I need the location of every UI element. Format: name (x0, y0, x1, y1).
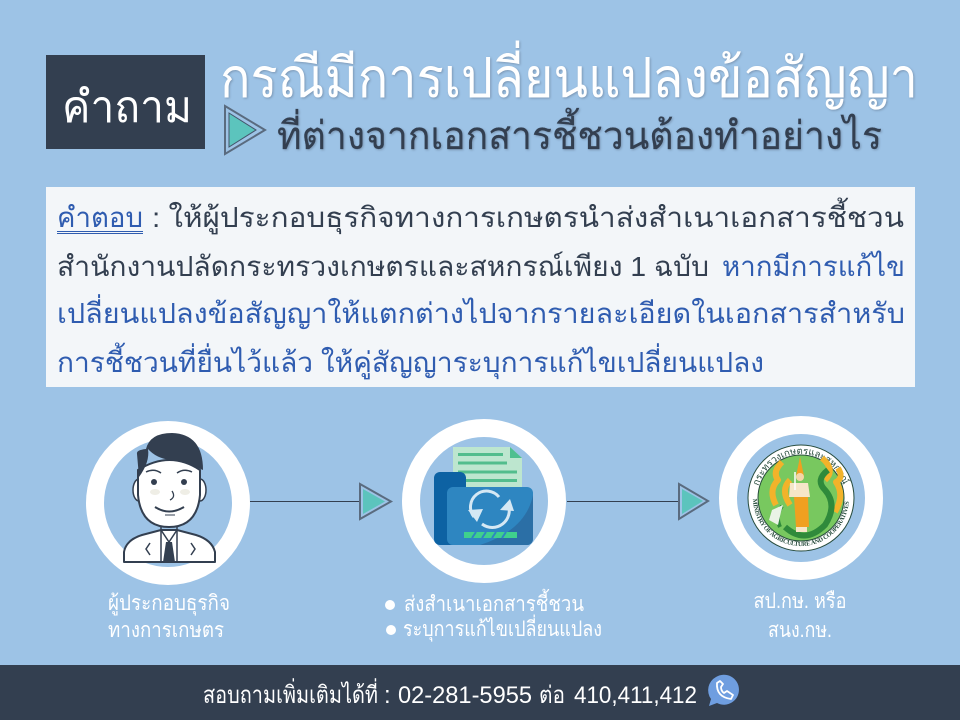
footer: 410,411,412 (574, 682, 697, 709)
answer line 1: : ให้ผู้ประกอบธุรกิจทางการเกษตรนำส่งสำเนาเอกสารชี้ชวน (152, 197, 904, 235)
document steps: ส่งสำเนาเอกสารชี้ชวน (404, 589, 584, 616)
answer line 2: หากมีการแก้ไข (722, 251, 905, 282)
footer: สอบถามเพิ่มเติมได้ที่ (203, 678, 378, 709)
icon: title arrow (225, 106, 265, 154)
arrow 1 (250, 484, 391, 519)
answer line 1: คำตอบ (57, 202, 143, 233)
title line 1: กรณีมีการเปลี่ยนแปลงข้อสัญญา (220, 40, 918, 110)
recipient label: สป.กษ. หรือ (754, 590, 846, 613)
title line 2: ที่ต่างจากเอกสารชี้ชวนต้องทำอย่างไร (277, 107, 882, 158)
operator label (108, 592, 230, 642)
icon: ministry seal: กระทรวงเกษตรและสหกรณ์ (754, 448, 851, 486)
icon: ministry seal (719, 416, 883, 580)
footer: ต่อ (539, 682, 565, 709)
footer: : (384, 682, 391, 709)
document steps: ระบุการแก้ไขเปลี่ยนแปลง (403, 614, 602, 642)
question badge: คำถาม (62, 83, 192, 132)
icon: phone bubble (708, 675, 739, 706)
question badge (46, 55, 205, 149)
recipient label (754, 590, 846, 642)
footer: 02-281-5955 (398, 682, 532, 709)
arrow 2 (567, 484, 708, 519)
operator label: ผู้ประกอบธุรกิจ (108, 592, 230, 616)
answer line 3: เปลี่ยนแปลงข้อสัญญาให้แตกต่างไปจากรายละเอียดในเอกสารสำหรับ (57, 294, 905, 329)
document steps (385, 589, 602, 642)
answer line 2: สำนักงานปลัดกระทรวงเกษตรและสหกรณ์เพียง 1 ฉบับ (57, 251, 709, 282)
answer line 4: การชี้ชวนที่ยื่นไว้แล้ว ให้คู่สัญญาระบุการแก้ไขเปลี่ยนแปลง (57, 342, 764, 380)
icon: business operator (95, 430, 241, 576)
panel: answer (46, 187, 915, 387)
footer (0, 665, 960, 720)
answer line 1 (57, 197, 904, 235)
recipient label: สนง.กษ. (768, 619, 832, 642)
icon: ministry seal: MINISTRY OF AGRICULTURE AND COOPERATIVES (752, 498, 849, 546)
icon: document folder (411, 428, 557, 574)
operator label: ทางการเกษตร (108, 619, 224, 642)
